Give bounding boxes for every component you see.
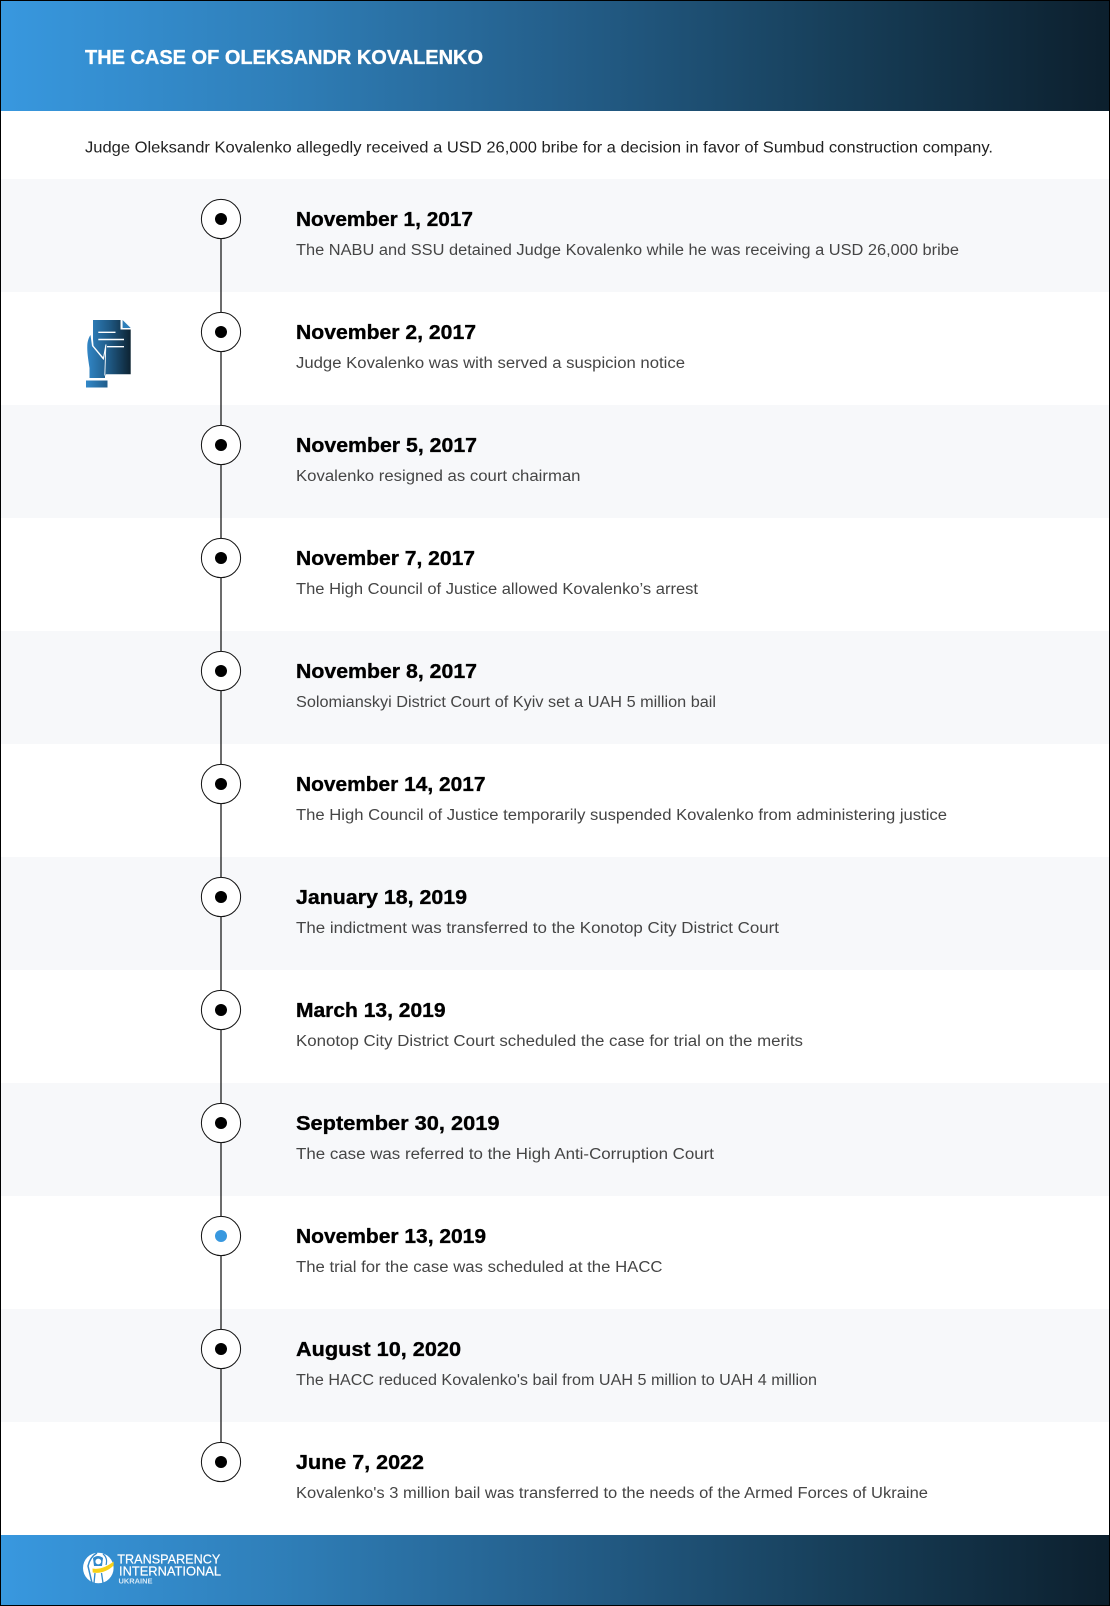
- description: Solomianskyi District Court of Kyiv set a UAH 5 million bail: [296, 694, 716, 711]
- date: August 10, 2020: [296, 1338, 461, 1361]
- footer banner: [0, 1535, 1110, 1606]
- marker: [201, 199, 241, 239]
- logo wordmark: [117, 1552, 221, 1586]
- marker: [201, 1103, 241, 1143]
- logo wordmark: INTERNATIONAL: [119, 1564, 221, 1579]
- logo wordmark: TRANSPARENCY: [117, 1552, 221, 1566]
- timeline entry: November 5, 2017: [201, 425, 580, 485]
- timeline entry: March 13, 2019: [201, 990, 803, 1050]
- marker: [201, 1329, 241, 1369]
- date: November 5, 2017: [296, 434, 477, 457]
- date: November 1, 2017: [296, 208, 473, 231]
- description: The trial for the case was scheduled at the HACC: [296, 1259, 662, 1276]
- logo: Transparency International Ukraine: [83, 1552, 221, 1586]
- date: September 30, 2019: [296, 1112, 500, 1135]
- description: The High Council of Justice allowed Kovalenko’s arrest: [296, 581, 699, 598]
- timeline entry: November 13, 2019: [201, 1216, 662, 1276]
- timeline entry: November 2, 2017: [201, 312, 685, 372]
- description: The High Council of Justice temporarily suspended Kovalenko from administering justice: [296, 807, 947, 824]
- description: Judge Kovalenko was with served a suspicion notice: [296, 355, 685, 372]
- description: The case was referred to the High Anti-Corruption Court: [296, 1146, 715, 1163]
- date: January 18, 2019: [296, 886, 467, 909]
- marker: [201, 425, 241, 465]
- header banner: [0, 0, 1110, 111]
- description: Kovalenko resigned as court chairman: [296, 468, 580, 485]
- date: November 7, 2017: [296, 547, 475, 570]
- marker: [201, 990, 241, 1030]
- description: The indictment was transferred to the Konotop City District Court: [296, 920, 780, 937]
- description: Konotop City District Court scheduled the case for trial on the merits: [296, 1033, 803, 1050]
- marker: [201, 764, 241, 804]
- timeline spine: [220, 219, 222, 1459]
- marker: [201, 312, 241, 352]
- marker: [201, 651, 241, 691]
- description: The NABU and SSU detained Judge Kovalenko while he was receiving a USD 26,000 bribe: [296, 242, 959, 259]
- timeline entry: November 7, 2017: [201, 538, 699, 598]
- date: November 2, 2017: [296, 321, 476, 344]
- date: November 13, 2019: [296, 1225, 486, 1248]
- intro text: Judge Oleksandr Kovalenko allegedly received a USD 26,000 bribe for a decision in favor of Sumbud construction company.: [85, 140, 993, 156]
- logo wordmark: UKRAINE: [118, 1579, 153, 1586]
- logo globe: [83, 1553, 114, 1583]
- timeline entry: August 10, 2020: [201, 1329, 817, 1389]
- marker: [201, 538, 241, 578]
- date: November 8, 2017: [296, 660, 477, 683]
- description: Kovalenko's 3 million bail was transferred to the needs of the Armed Forces of Ukraine: [296, 1485, 928, 1502]
- marker: [201, 877, 241, 917]
- date: March 13, 2019: [296, 999, 446, 1022]
- date: November 14, 2017: [296, 773, 486, 796]
- date: June 7, 2022: [296, 1451, 424, 1474]
- title: THE CASE OF OLEKSANDR KOVALENKO: [85, 46, 483, 69]
- timeline entry: November 1, 2017: [201, 199, 959, 259]
- icon: hand holding document: [86, 320, 131, 388]
- timeline entry: November 8, 2017: [201, 651, 716, 711]
- row bands: [1, 179, 1109, 1422]
- marker (blue): [201, 1216, 241, 1256]
- description: The HACC reduced Kovalenko's bail from UAH 5 million to UAH 4 million: [296, 1372, 817, 1389]
- marker: [201, 1442, 241, 1482]
- timeline entry: January 18, 2019: [201, 877, 780, 937]
- timeline entry: September 30, 2019: [201, 1103, 715, 1163]
- timeline entry: November 14, 2017: [201, 764, 947, 824]
- timeline entry: June 7, 2022: [201, 1442, 928, 1502]
